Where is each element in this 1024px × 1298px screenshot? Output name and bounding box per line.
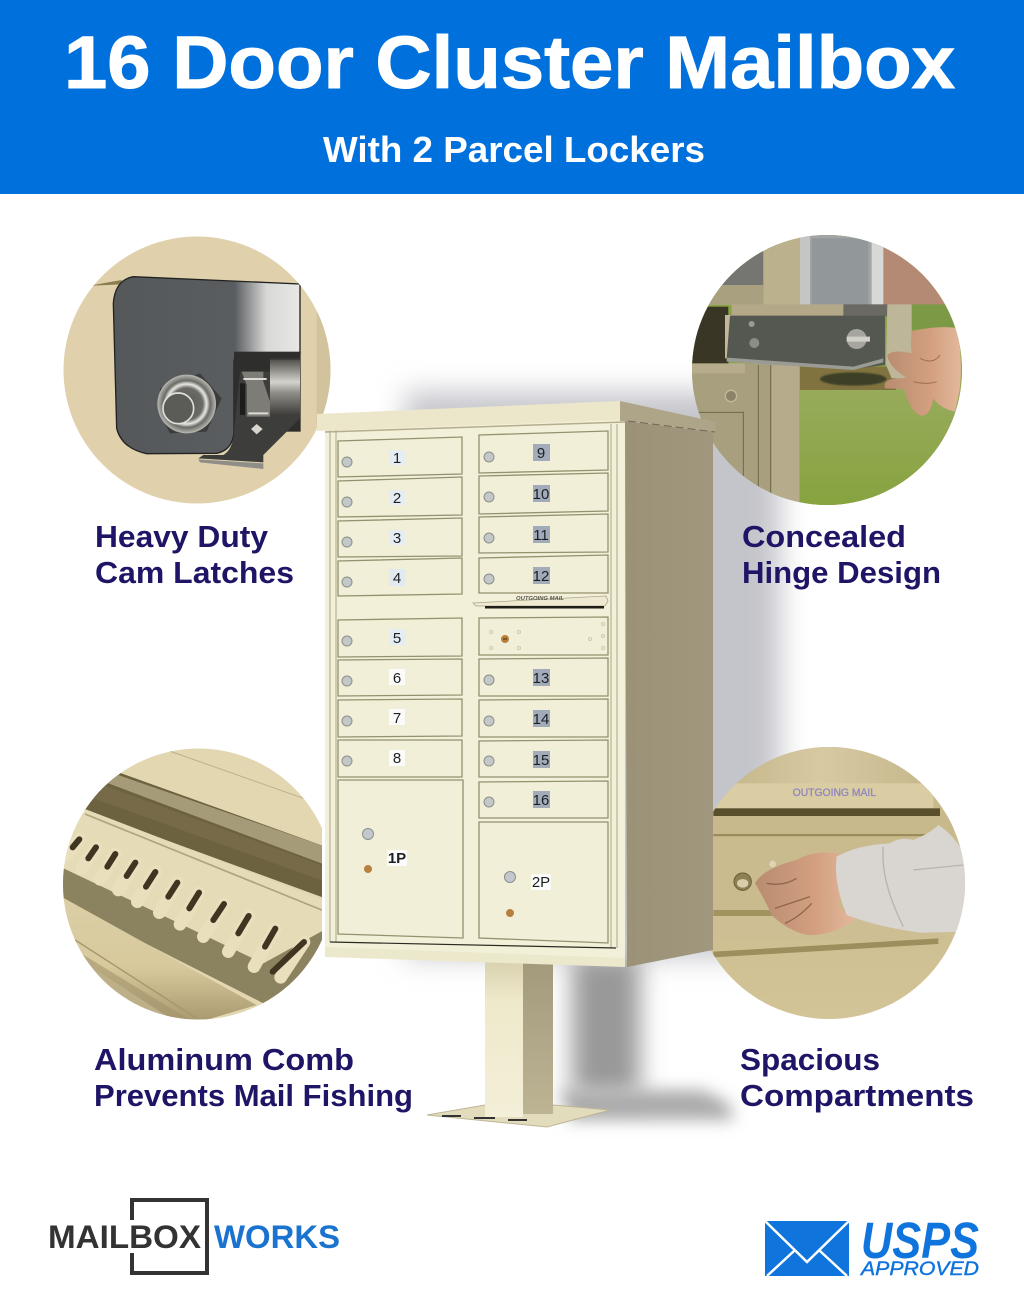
feature label: hinge: Concealed bbox=[742, 519, 906, 554]
lower door frame bbox=[692, 363, 800, 502]
cam cylinder bbox=[198, 358, 300, 462]
door 13 bbox=[479, 658, 608, 696]
door 6: 6 bbox=[393, 670, 401, 687]
feature label: compartments bbox=[740, 1042, 974, 1113]
door 2 bbox=[338, 477, 462, 517]
door 13: 13 bbox=[533, 670, 549, 687]
door 4 bbox=[338, 558, 462, 596]
comb slots bbox=[67, 839, 304, 977]
title: 16 Door Cluster Mailbox bbox=[64, 21, 955, 104]
feature label: hinge: Hinge Design bbox=[742, 555, 941, 590]
feature label: hinge bbox=[742, 519, 941, 590]
subtitle: With 2 Parcel Lockers bbox=[323, 129, 705, 170]
lower lip bbox=[325, 947, 625, 967]
circle photo: aluminum comb bbox=[58, 745, 330, 1027]
logo: Mailbox Works: MAILBOX bbox=[48, 1219, 202, 1255]
mailbox drop shadow bbox=[405, 392, 780, 1120]
door 11 bbox=[479, 514, 608, 553]
door 1: 1 bbox=[393, 450, 401, 467]
parcel locker 2P bbox=[479, 822, 608, 943]
door 2: 2 bbox=[393, 490, 401, 507]
door 10: 10 bbox=[533, 486, 549, 503]
door lock bbox=[734, 873, 751, 890]
feature label: cam latches bbox=[95, 519, 294, 590]
sleeve bbox=[836, 825, 967, 933]
parcel locker 2P: 2P bbox=[532, 874, 550, 891]
outgoing mail lettering: OUTGOING MAIL bbox=[793, 787, 876, 799]
steel latch plate bbox=[113, 277, 300, 454]
lock nut bbox=[158, 373, 222, 433]
mailbox cabinet bbox=[317, 401, 716, 967]
header banner bbox=[0, 0, 1024, 194]
door 5: 5 bbox=[393, 630, 401, 647]
light comb face bbox=[63, 809, 289, 992]
feature label: compartments: Compartments bbox=[740, 1078, 974, 1113]
logo: USPS approved: APPROVED bbox=[860, 1259, 979, 1280]
door 9 bbox=[479, 431, 608, 473]
grass lawn bbox=[799, 388, 966, 508]
feature label: comb: Prevents Mail Fishing bbox=[94, 1078, 413, 1113]
door 3 bbox=[338, 518, 462, 557]
door 12: 12 bbox=[533, 568, 549, 585]
collection door bbox=[479, 617, 608, 655]
door 16: 16 bbox=[533, 792, 549, 809]
parcel locker 1P bbox=[338, 780, 463, 938]
logo: Mailbox Works: WORKS bbox=[214, 1219, 340, 1255]
door 11: 11 bbox=[533, 527, 549, 544]
pedestal post and base bbox=[427, 962, 610, 1127]
door 4: 4 bbox=[393, 570, 401, 587]
logo: Mailbox Works bbox=[48, 1200, 340, 1273]
parcel locker 1P: 1P bbox=[388, 850, 406, 867]
outgoing mail slot: OUTGOING MAIL bbox=[516, 596, 564, 602]
door 5 bbox=[338, 618, 462, 657]
icon: envelope bbox=[765, 1221, 849, 1276]
door 8 bbox=[338, 740, 462, 777]
circle photo: concealed hinge bbox=[692, 235, 962, 505]
feature label: compartments: Spacious bbox=[740, 1042, 880, 1077]
logo: USPS approved bbox=[765, 1212, 979, 1280]
hand bbox=[755, 852, 855, 935]
front panel bbox=[325, 418, 625, 966]
hand bbox=[885, 327, 961, 416]
door panel held bbox=[886, 304, 912, 378]
door 9: 9 bbox=[537, 445, 545, 462]
comb shadow band bbox=[83, 772, 330, 900]
door 8: 8 bbox=[393, 750, 401, 767]
door 16 bbox=[479, 781, 608, 818]
door 7: 7 bbox=[393, 710, 401, 727]
door 6 bbox=[338, 659, 462, 696]
feature label: comb: Aluminum Comb bbox=[94, 1042, 354, 1077]
door 14 bbox=[479, 699, 608, 737]
hinge bracket bbox=[732, 304, 845, 316]
door 1 bbox=[338, 437, 462, 477]
dark band below comb bbox=[60, 867, 330, 1007]
door 12 bbox=[479, 555, 608, 593]
door 7 bbox=[338, 699, 462, 737]
feature label: cam latches: Cam Latches bbox=[95, 555, 294, 590]
door 15: 15 bbox=[533, 752, 549, 769]
circle photo: spacious compartments bbox=[711, 747, 965, 1019]
door 10 bbox=[479, 473, 608, 514]
roof cap bbox=[317, 401, 620, 431]
door 3: 3 bbox=[393, 530, 401, 547]
feature label: cam latches: Heavy Duty bbox=[95, 519, 269, 554]
side panel bbox=[625, 421, 713, 967]
logo: USPS approved: USPS bbox=[861, 1212, 979, 1269]
outgoing mail slot bbox=[473, 596, 608, 608]
circle photo: heavy duty cam latch bbox=[60, 225, 337, 510]
door 14: 14 bbox=[533, 711, 549, 728]
feature label: comb bbox=[94, 1042, 413, 1113]
open locker dark interior bbox=[692, 306, 728, 364]
door 15 bbox=[479, 740, 608, 777]
